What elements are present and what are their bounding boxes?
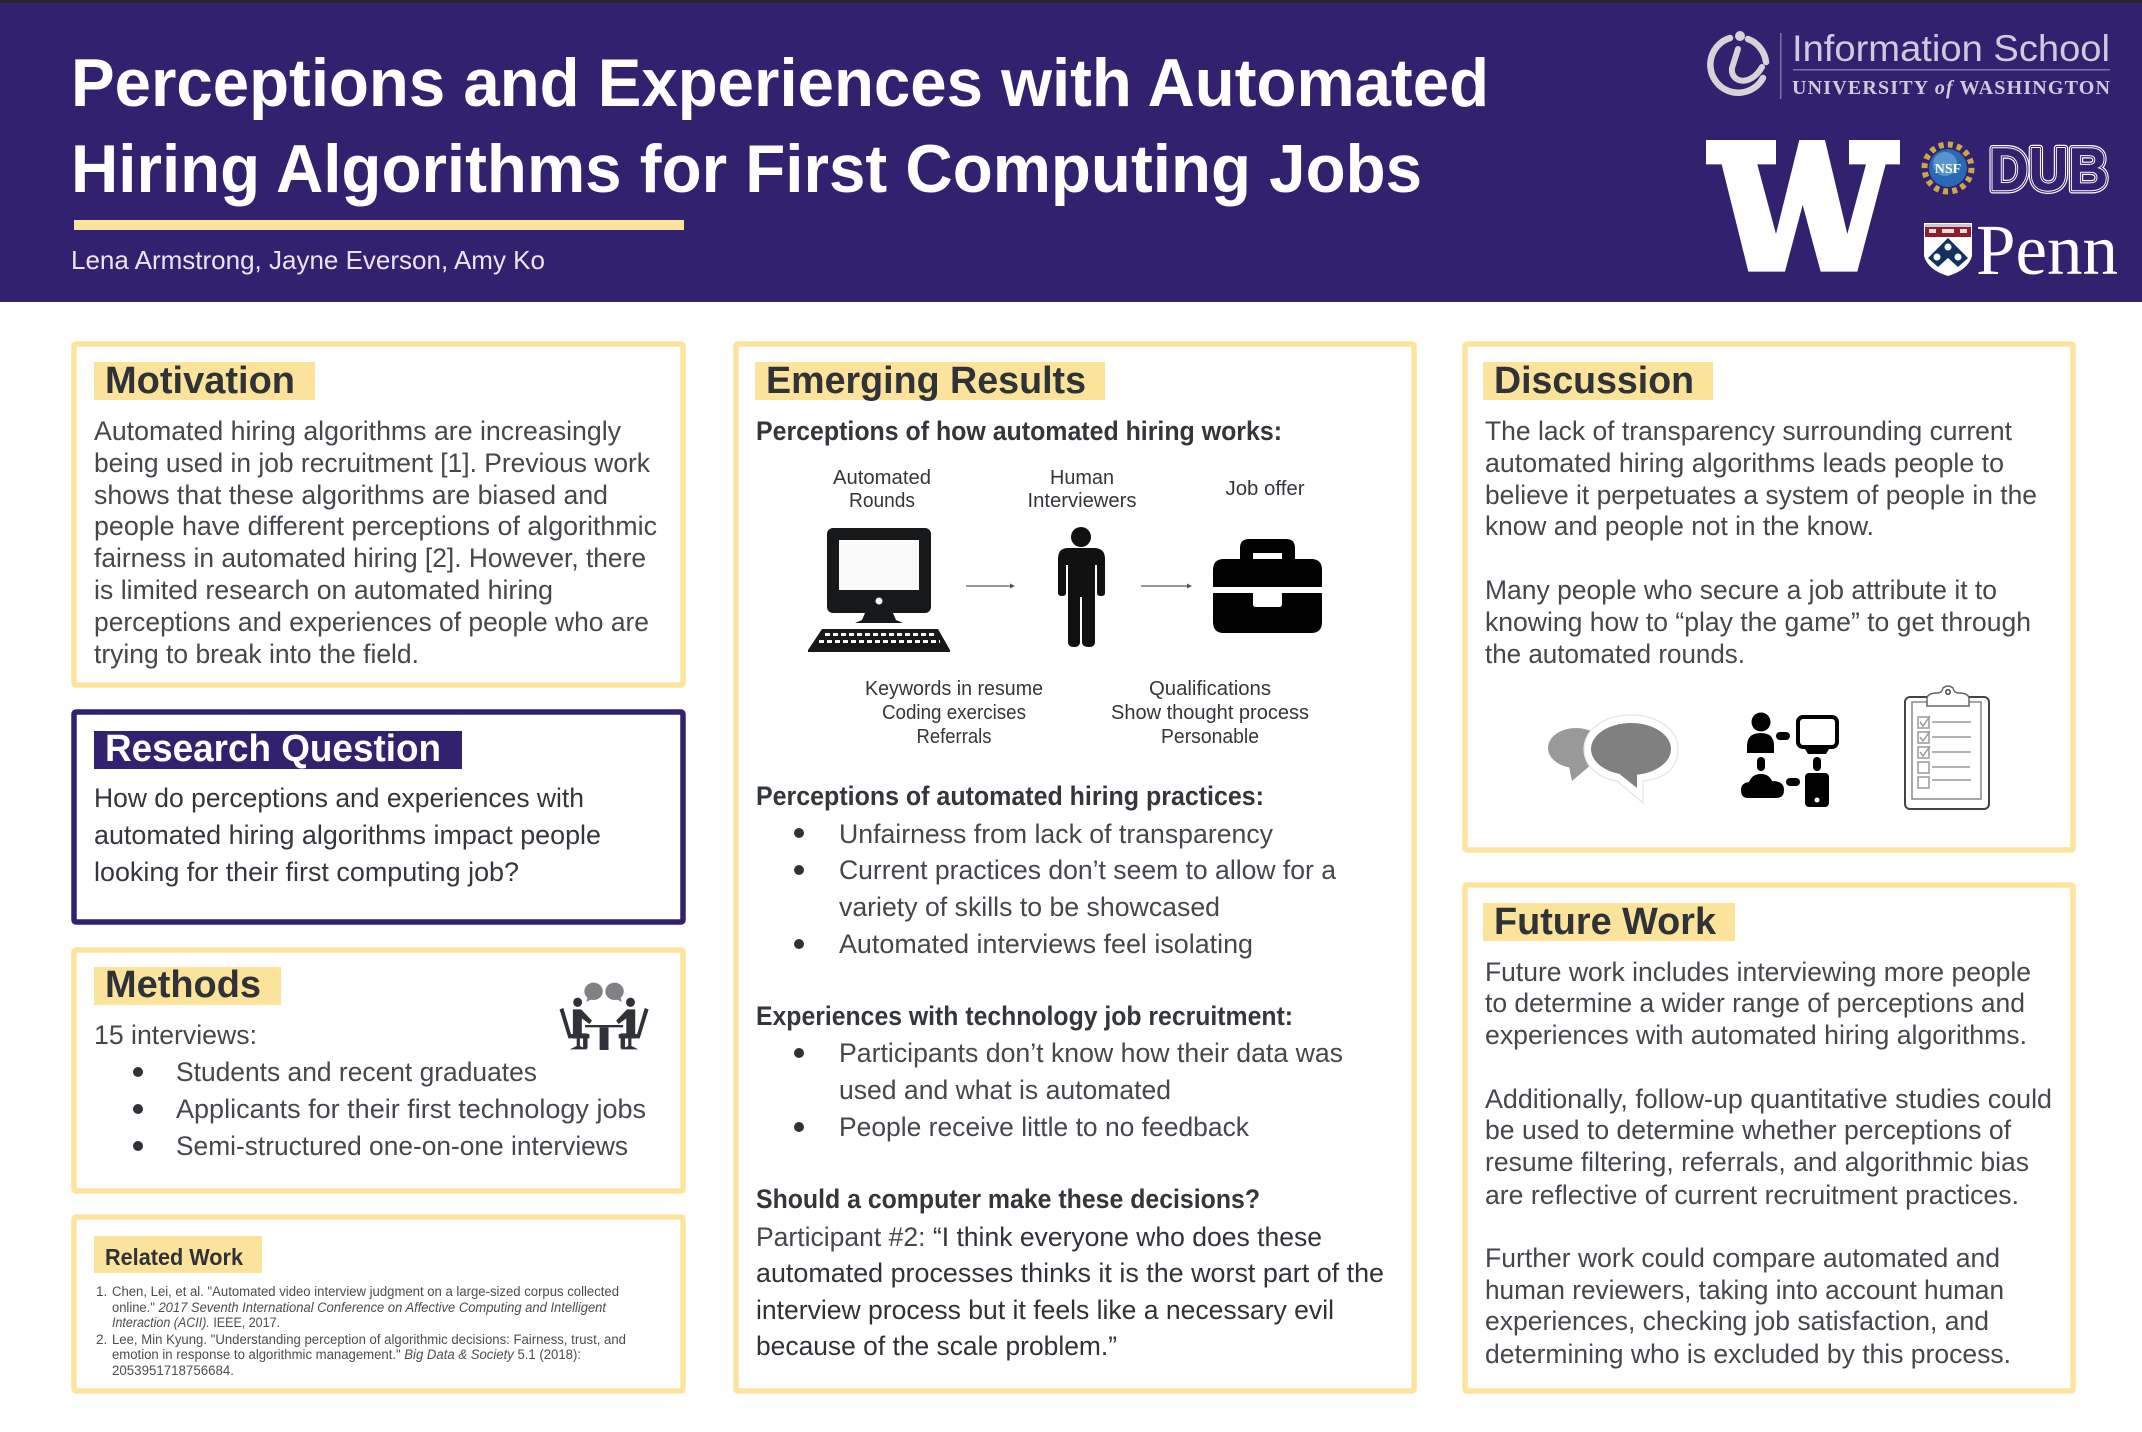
- recruitment experiences list: used and what is automated: [839, 1075, 1171, 1105]
- research question text: [94, 783, 601, 887]
- future work text: be used to determine whether perceptions of: [1485, 1115, 2011, 1145]
- criteria: human interviewers: [1111, 678, 1309, 748]
- subheading: hiring practices: Perceptions of automated hiring practices:: [756, 781, 1264, 811]
- logo: Information School: UNIVERSITY of WASHINGTON: [1792, 77, 2111, 99]
- participant quote: [756, 1222, 1384, 1361]
- participant quote: because of the scale problem.”: [756, 1331, 1117, 1361]
- motivation text: people have different perceptions of algorithmic: [94, 511, 657, 541]
- icon: speech bubbles: [1548, 715, 1678, 803]
- criteria: automated rounds: Coding exercises: [882, 702, 1026, 724]
- motivation text: Automated hiring algorithms are increasingly: [94, 416, 621, 446]
- future work text: experiences with automated hiring algorithms.: [1485, 1020, 2027, 1050]
- hiring practices list: [794, 819, 1337, 959]
- future work text: are reflective of current recruitment practices.: [1485, 1180, 2019, 1210]
- title underline: [74, 220, 684, 230]
- motivation text: being used in job recruitment [1]. Previous work: [94, 448, 650, 478]
- panel: research question: [74, 712, 683, 922]
- icon: network of person, monitor, cloud, phone: [1741, 712, 1837, 807]
- criteria: automated rounds: Referrals: [916, 726, 992, 748]
- authors: Lena Armstrong, Jayne Everson, Amy Ko: [71, 245, 545, 275]
- motivation text: is limited research on automated hiring: [94, 575, 553, 605]
- logo: DUB: DUB: [1989, 136, 2108, 203]
- discussion text: The lack of transparency surrounding current: [1485, 416, 2012, 446]
- future work text: Future work includes interviewing more people: [1485, 957, 2031, 987]
- icon: interview meeting: [560, 983, 649, 1050]
- future work text: [1485, 957, 2052, 1369]
- icon: clipboard checklist: [1905, 686, 1989, 809]
- heading: research question: Research Question: [105, 728, 441, 770]
- hiring practices list: variety of skills to be showcased: [839, 892, 1220, 922]
- heading: motivation: Motivation: [105, 360, 295, 402]
- motivation text: fairness in automated hiring [2]. However, there: [94, 543, 646, 573]
- title: Perceptions and Experiences with Automated: [71, 45, 1489, 121]
- logo: Information School: Information School: [1792, 28, 2110, 69]
- subheading: how automated hiring works: Perceptions of how automated hiring works:: [756, 416, 1282, 446]
- panel: discussion: [1465, 344, 2073, 850]
- panel: future work: [1465, 885, 2073, 1391]
- references: [96, 1284, 626, 1378]
- heading: methods: Methods: [105, 964, 261, 1006]
- diagram labels: [833, 467, 1305, 512]
- diagram labels: Human: [1050, 467, 1114, 489]
- hiring practices list: Unfairness from lack of transparency: [839, 819, 1273, 849]
- heading: emerging results: Emerging Results: [766, 360, 1086, 402]
- logo: NSF: NSF: [1935, 162, 1961, 177]
- future work text: Further work could compare automated and: [1485, 1243, 2000, 1273]
- arrow: computer to person: [966, 584, 1015, 588]
- references: 2.: [96, 1332, 107, 1347]
- logo: DUB: DUB: [1989, 136, 2108, 203]
- recruitment experiences list: Participants don’t know how their data was: [839, 1038, 1343, 1068]
- heading: related work: [94, 1236, 262, 1273]
- participant quote: Participant #2: “I think everyone who does these: [756, 1222, 1322, 1252]
- title: Hiring Algorithms for First Computing Jobs: [71, 131, 1422, 207]
- future work text: determining who is excluded by this process.: [1485, 1339, 2011, 1369]
- references: Lee, Min Kyung. "Understanding perception of algorithmic decisions: Fairness, trust, and: [112, 1332, 626, 1347]
- references: online." 2017 Seventh International Conference on Affective Computing and Intelligent: [112, 1300, 607, 1315]
- criteria: human interviewers: Personable: [1161, 726, 1259, 748]
- research question text: How do perceptions and experiences with: [94, 783, 584, 813]
- heading: related work: Related Work: [105, 1244, 243, 1270]
- criteria: automated rounds: Keywords in resume: [865, 678, 1043, 700]
- discussion text: know and people not in the know.: [1485, 511, 1874, 541]
- heading: discussion: Discussion: [1494, 360, 1694, 402]
- references: Chen, Lei, et al. "Automated video interview judgment on a large-sized corpus collected: [112, 1284, 619, 1299]
- diagram labels: Rounds: [849, 490, 915, 512]
- icon: person: [1058, 527, 1105, 647]
- methods list: Applicants for their first technology jobs: [176, 1094, 646, 1124]
- diagram labels: Interviewers: [1028, 490, 1136, 512]
- participant quote: automated processes thinks it is the worst part of the: [756, 1258, 1384, 1288]
- criteria: automated rounds: [865, 678, 1043, 748]
- motivation text: shows that these algorithms are biased and: [94, 480, 608, 510]
- methods list: Semi-structured one-on-one interviews: [176, 1131, 628, 1161]
- subheading: technology job recruitment: Experiences with technology job recruitment:: [756, 1001, 1293, 1031]
- motivation text: trying to break into the field.: [94, 639, 419, 669]
- references: emotion in response to algorithmic management." Big Data & Society 5.1 (2018):: [112, 1347, 581, 1362]
- methods list: [94, 1020, 646, 1161]
- discussion text: believe it perpetuates a system of people in the: [1485, 480, 2037, 510]
- recruitment experiences list: People receive little to no feedback: [839, 1112, 1249, 1142]
- diagram labels: Job offer: [1226, 478, 1305, 500]
- research question text: looking for their first computing job?: [94, 857, 519, 887]
- future work text: resume filtering, referrals, and algorithmic bias: [1485, 1147, 2029, 1177]
- discussion text: automated hiring algorithms leads people to: [1485, 448, 2004, 478]
- logo: Penn wordmark: Penn: [1976, 210, 2118, 290]
- recruitment experiences list: [794, 1038, 1343, 1142]
- motivation text: perceptions and experiences of people who are: [94, 607, 649, 637]
- diagram labels: Automated: [833, 467, 931, 489]
- panel: related work: [74, 1217, 683, 1391]
- motivation text: [94, 416, 657, 669]
- panel: emerging results: [736, 344, 1414, 1391]
- hiring practices list: Automated interviews feel isolating: [839, 929, 1253, 959]
- participant quote: interview process but it feels like a necessary evil: [756, 1295, 1334, 1325]
- hiring process diagram: [808, 467, 1322, 748]
- future work text: experiences, checking job satisfaction, and: [1485, 1306, 1989, 1336]
- research question text: automated hiring algorithms impact people: [94, 820, 601, 850]
- title: [71, 45, 1489, 207]
- methods list: 15 interviews:: [94, 1020, 257, 1050]
- panel: motivation: [74, 344, 683, 685]
- arrow: person to briefcase: [1141, 584, 1192, 588]
- subheading: should a computer decide: Should a computer make these decisions?: [756, 1184, 1260, 1214]
- references: 2053951718756684.: [112, 1363, 234, 1378]
- discussion text: [1485, 416, 2037, 669]
- logo: DUB: DUB: [1989, 136, 2108, 203]
- logo: NSF: [1924, 144, 1972, 192]
- logo: DUB: DUB: [1989, 136, 2108, 203]
- references: Interaction (ACII). IEEE, 2017.: [112, 1315, 280, 1330]
- logo: W: [1706, 140, 1900, 272]
- methods list: Students and recent graduates: [176, 1057, 537, 1087]
- references: 1.: [96, 1284, 107, 1299]
- heading: future work: Future Work: [1494, 901, 1717, 943]
- future work text: Additionally, follow-up quantitative studies could: [1485, 1084, 2052, 1114]
- future work text: human reviewers, taking into account human: [1485, 1275, 2004, 1305]
- future work text: to determine a wider range of perceptions and: [1485, 988, 2025, 1018]
- icon: computer: [808, 528, 950, 652]
- header banner: [0, 0, 2142, 302]
- criteria: human interviewers: Qualifications: [1149, 678, 1271, 700]
- discussion text: Many people who secure a job attribute it to: [1485, 575, 1997, 605]
- discussion text: knowing how to “play the game” to get through: [1485, 607, 2031, 637]
- logo: Penn shield: [1924, 223, 1972, 276]
- hiring practices list: Current practices don’t seem to allow for a: [839, 855, 1337, 885]
- logo: Information School: [1710, 28, 2111, 99]
- discussion text: the automated rounds.: [1485, 639, 1745, 669]
- criteria: human interviewers: Show thought process: [1111, 702, 1309, 724]
- icon: briefcase: [1213, 539, 1322, 633]
- panel: methods: [74, 950, 683, 1191]
